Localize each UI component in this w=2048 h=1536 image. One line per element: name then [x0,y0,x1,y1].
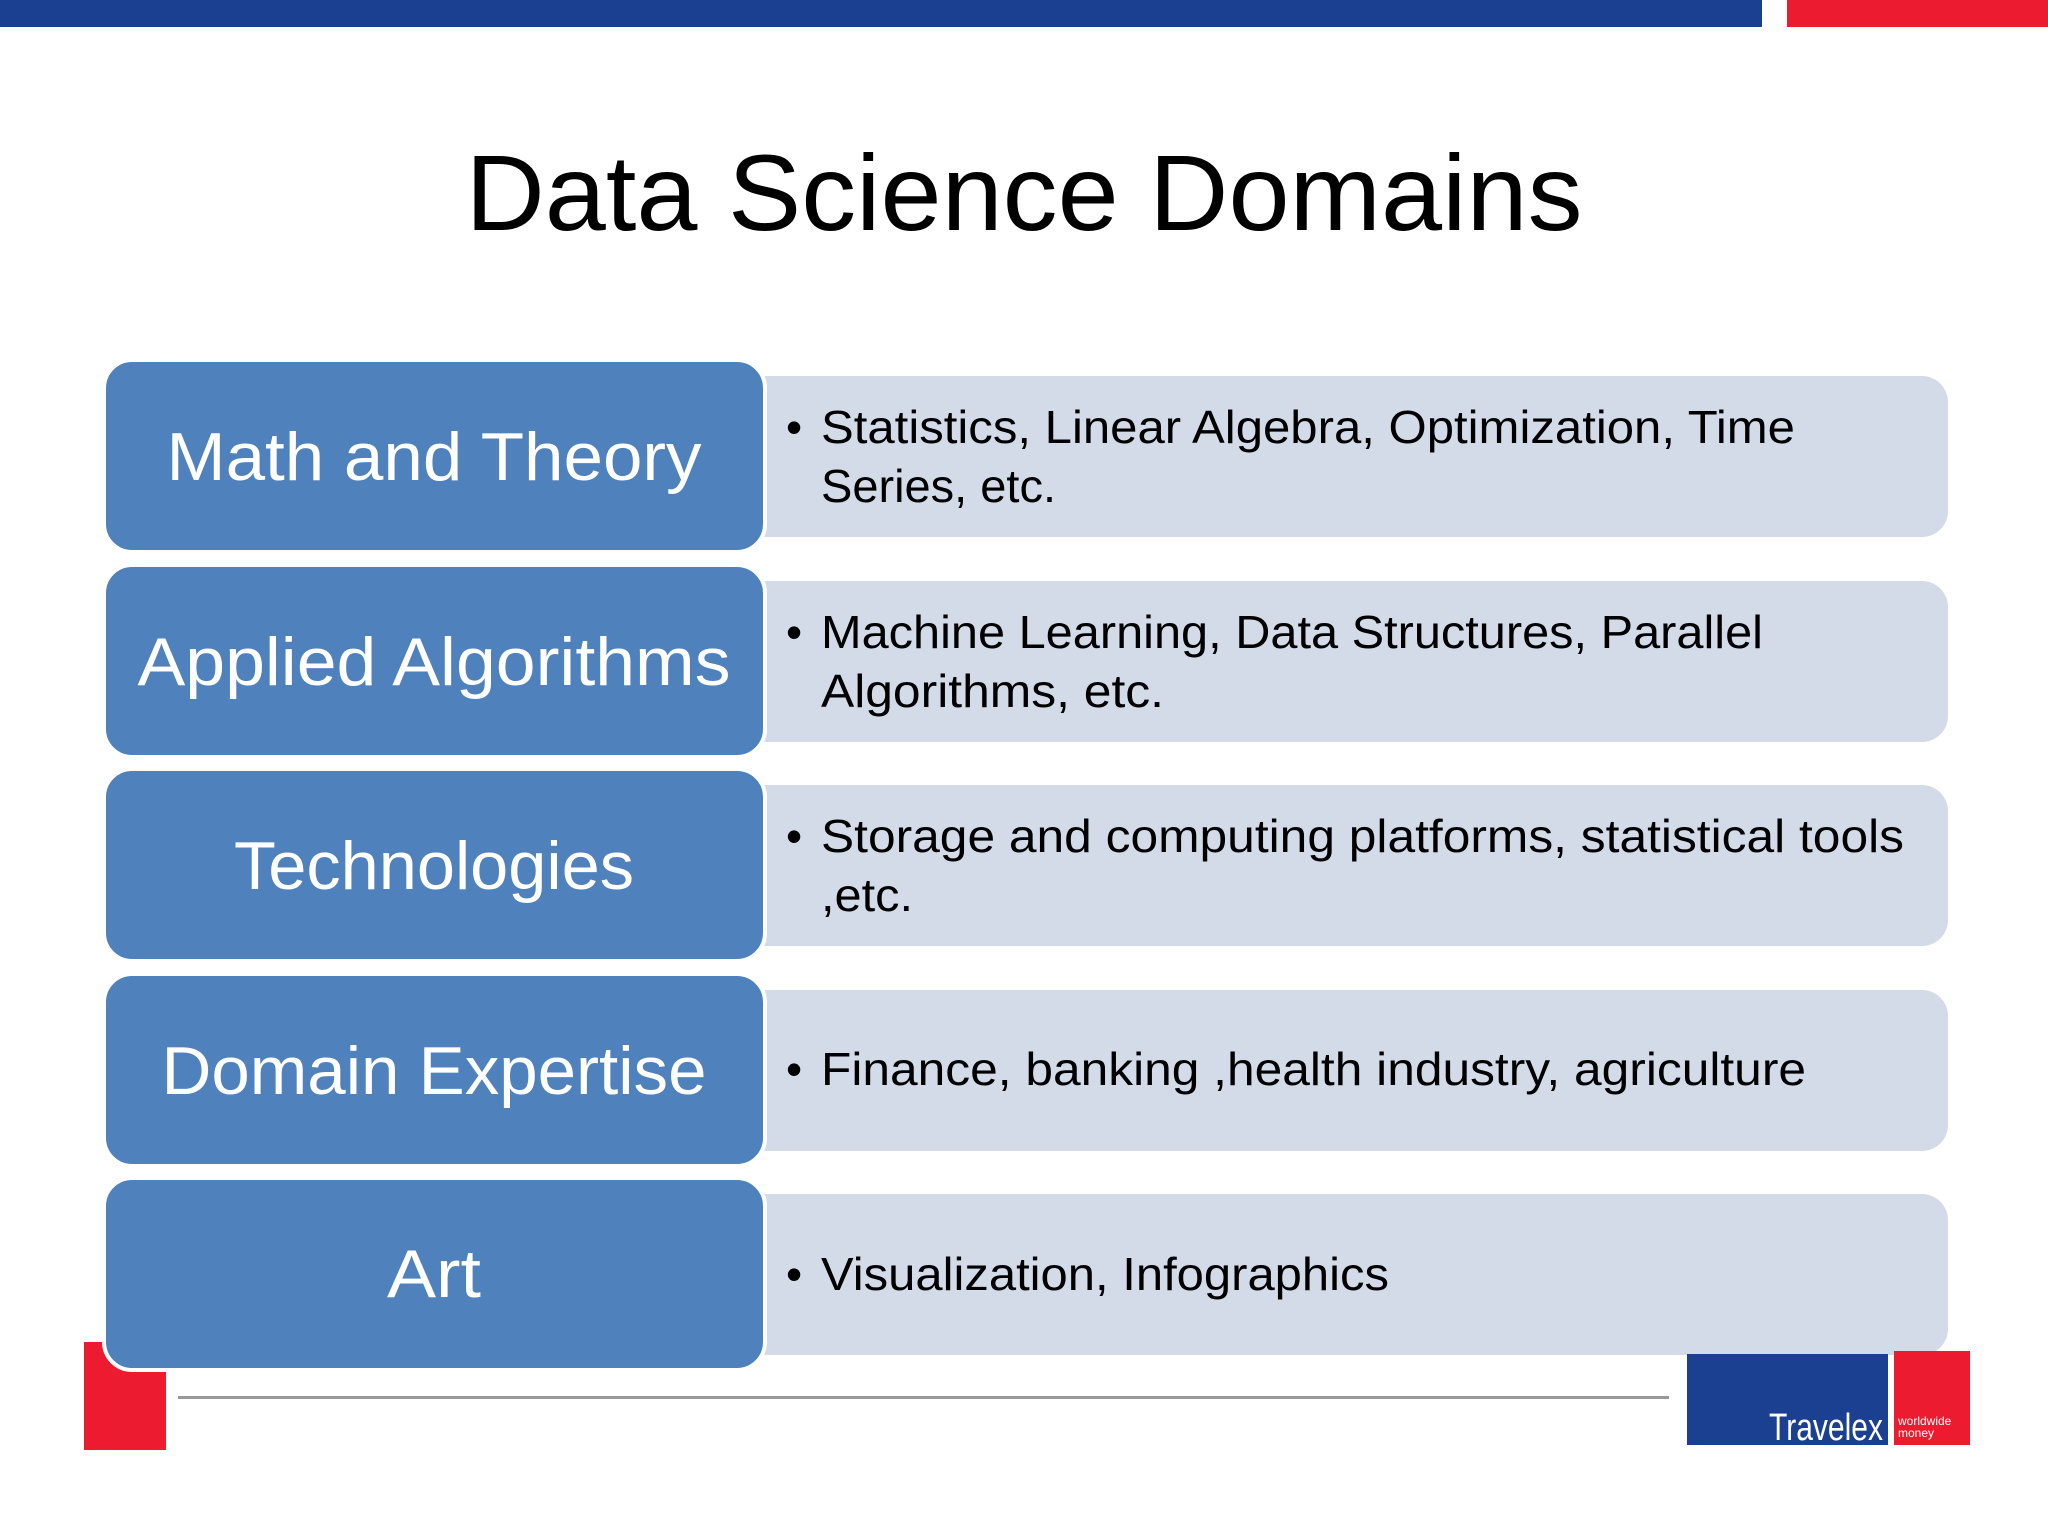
detail box 1 [740,376,1948,537]
label box 1 [104,360,765,552]
row 4 [104,974,1948,1166]
label box 5: Art [387,1236,481,1312]
detail box 4: Finance, banking ,health industry, agriculture [821,1043,1806,1095]
row 5 [104,1178,1948,1370]
detail box 2: • [786,606,802,658]
detail box 3: Storage and computing platforms, statistical tools [821,810,1904,862]
detail box 2: Algorithms, etc. [821,665,1164,717]
logo: Travelex: money [1898,1426,1934,1440]
label box 4: Domain Expertise [162,1033,706,1109]
logo: Travelex: Travelex [1769,1407,1883,1449]
logo: Travelex: worldwide [1897,1414,1952,1428]
detail box 4: • [786,1043,802,1095]
top bar: blue [0,0,1762,27]
detail box 1: Statistics, Linear Algebra, Optimization, Time [821,401,1795,453]
label box 2 [104,565,765,757]
detail box 5: • [786,1248,802,1300]
label box 1: Math and Theory [166,419,702,495]
footer red square [84,1342,166,1450]
label box 3: Technologies [234,828,634,904]
detail box 4 [740,990,1948,1151]
footer line [178,1396,1669,1399]
detail box 3 [740,785,1948,946]
detail box 5: Visualization, Infographics [821,1248,1389,1300]
logo: Travelex [1687,1351,1970,1449]
label box 3 [104,769,765,961]
detail box 2 [740,581,1948,742]
label box 5 [104,1178,765,1370]
row 1 [104,360,1948,552]
top bar: red [1787,0,2048,27]
detail box 1: Series, etc. [821,460,1056,512]
detail box 3: • [786,810,802,862]
detail box 1: • [786,401,802,453]
label box 4 [104,974,765,1166]
detail box 3: ,etc. [821,869,913,921]
row 2 [104,565,1948,757]
row 3 [104,769,1948,961]
title: Data Science Domains [466,132,1582,253]
detail box 5 [740,1194,1948,1355]
label box 2: Applied Algorithms [138,624,730,700]
detail box 2: Machine Learning, Data Structures, Parallel [821,606,1763,658]
